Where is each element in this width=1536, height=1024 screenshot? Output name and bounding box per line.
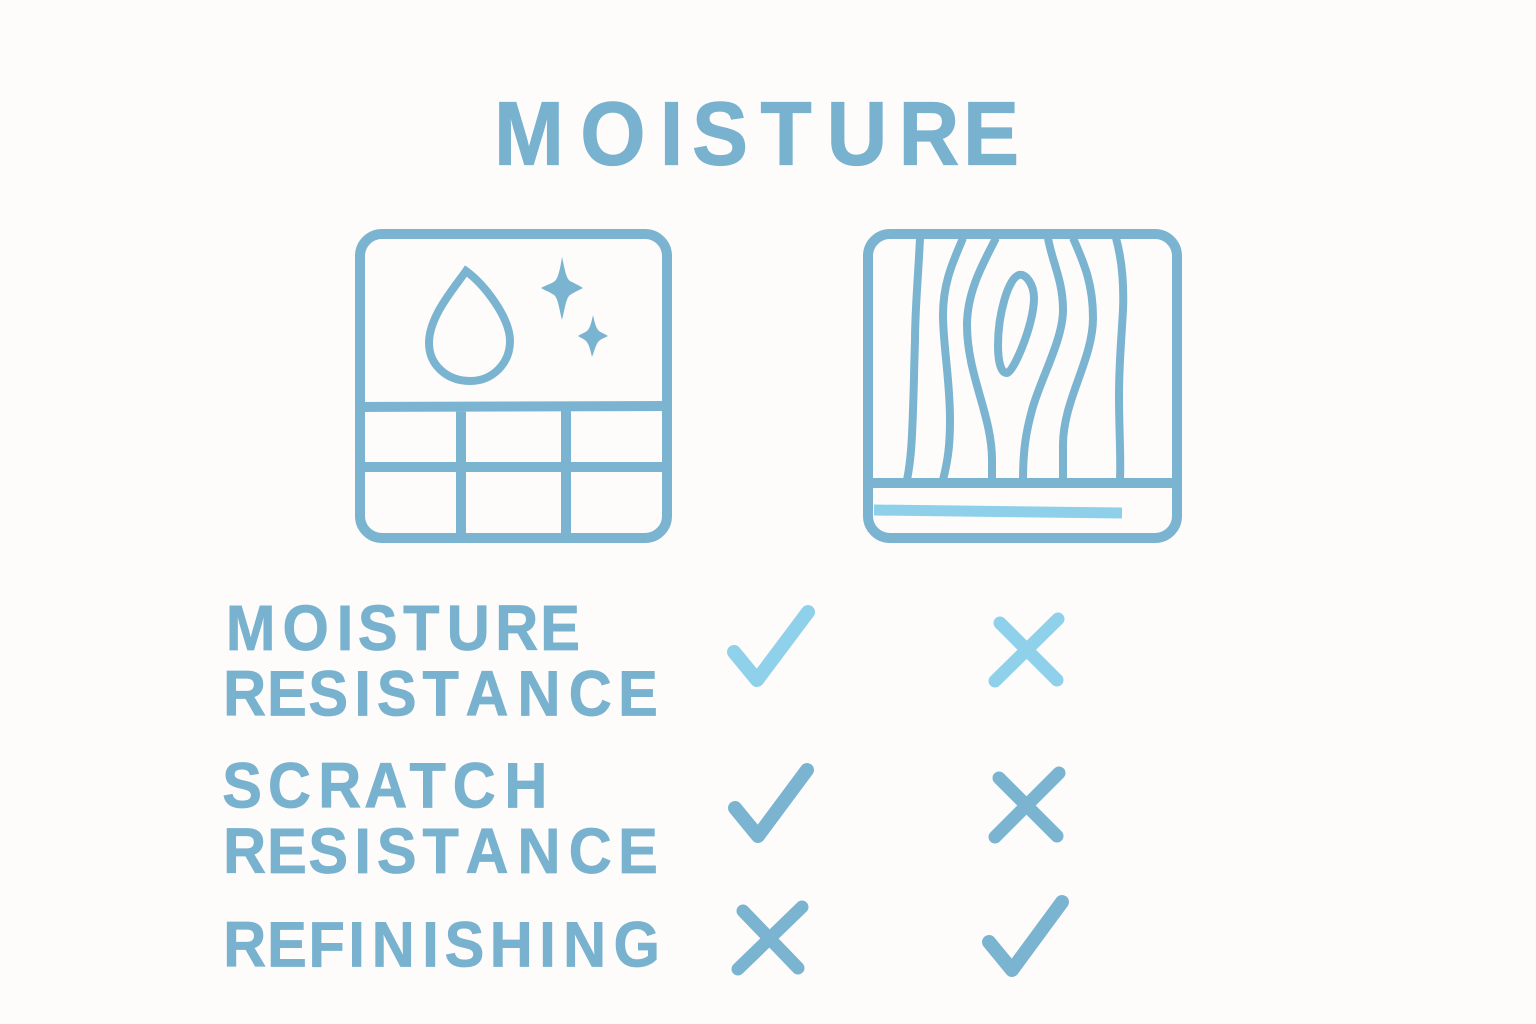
title: MOISTURE	[494, 84, 1019, 184]
panel: wood icon	[868, 234, 1177, 538]
icon: check, tile scratch resistance	[735, 770, 807, 836]
icon: water drop	[429, 271, 510, 381]
label: scratch resistance	[222, 751, 658, 887]
panel: tile icon	[360, 234, 667, 538]
label: scratch resistance: SCRATCH	[222, 751, 547, 822]
label: moisture resistance	[223, 593, 658, 730]
wood grain lines	[907, 238, 1123, 480]
icon: small sparkle	[578, 315, 608, 357]
wood knot	[998, 275, 1034, 373]
icon: cross, wood scratch resistance	[995, 773, 1059, 837]
label: moisture resistance: MOISTURE	[226, 593, 580, 664]
icon: large sparkle	[541, 257, 583, 320]
icon: check, wood refinishing	[989, 902, 1062, 970]
icon: cross, wood moisture resistance	[995, 619, 1058, 681]
label: refinishing: REFINISHING	[223, 910, 660, 981]
icon: cross, tile refinishing	[738, 907, 802, 969]
icon: check, tile moisture resistance	[734, 612, 808, 680]
highlight bar	[874, 510, 1122, 513]
label: scratch resistance: RESISTANCE	[223, 816, 658, 887]
label: moisture resistance: RESISTANCE	[223, 659, 658, 730]
